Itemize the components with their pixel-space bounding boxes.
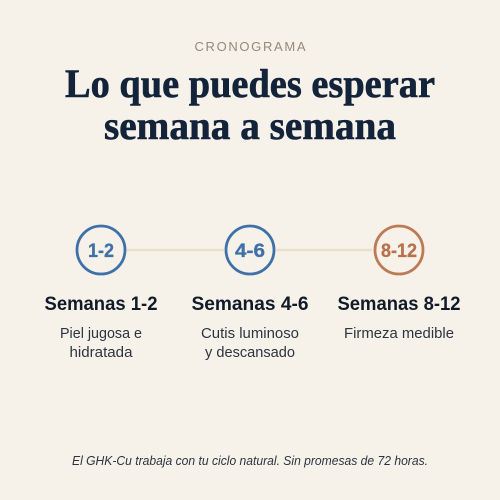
step 2 text [192,293,309,361]
step 1 text [44,293,158,361]
step marker 4-6 [226,226,274,274]
step marker 8-12: 8-12 [381,241,417,262]
step 3 text [338,293,461,342]
title [65,61,435,148]
step 2 text: y descansado [205,344,295,361]
eyebrow: cronograma: CRONOGRAMA [194,39,306,54]
step marker 4-6: 4-6 [235,241,265,262]
step 2 text: Semanas 4-6 [192,293,309,315]
title: Lo que puedes esperar [65,61,435,106]
step 1 text: hidratada [70,344,133,361]
step 1 text: Semanas 1-2 [44,293,158,315]
title: semana a semana [104,103,396,148]
step 1 text: Piel jugosa e [60,325,142,342]
step 3 text: Firmeza medible [344,325,454,342]
footnote: El GHK-Cu trabaja con tu ciclo natural. Sin promesas de 72 horas. [72,454,428,468]
timeline connector lines [127,249,372,251]
step marker 8-12 [375,226,423,274]
step marker 1-2 [77,226,125,274]
step marker 1-2: 1-2 [88,241,114,262]
step 2 text: Cutis luminoso [201,325,299,342]
step 3 text: Semanas 8-12 [338,293,461,315]
